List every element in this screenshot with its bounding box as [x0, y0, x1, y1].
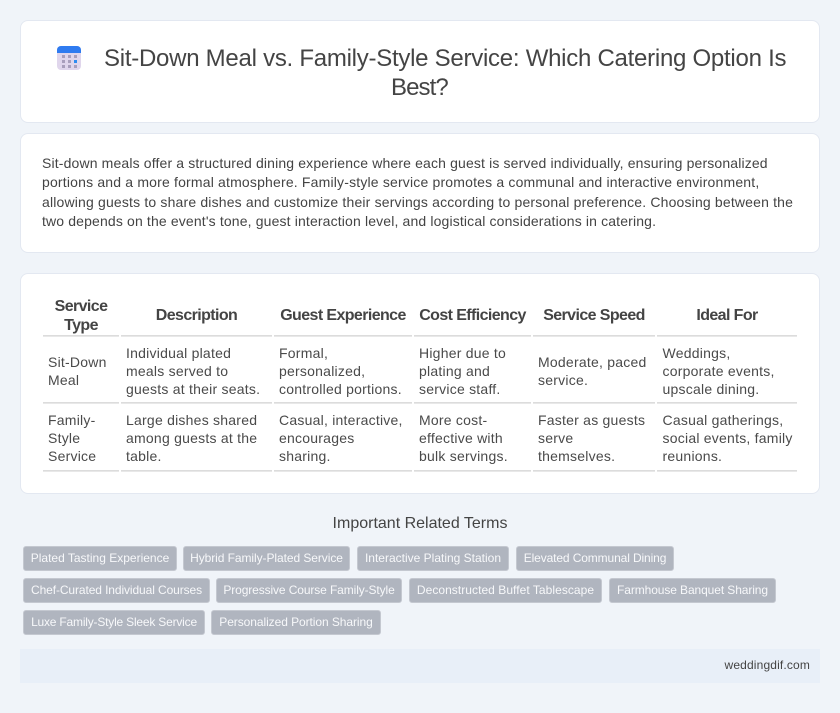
row: Family-Style Service: sharing.: [279, 448, 331, 464]
row: Family-Style Service: More cost-: [419, 412, 487, 428]
tag list: related terms: Progressive Course Family-Style: [223, 583, 395, 597]
panel: comparison table card: [20, 273, 820, 494]
column headers: Type: [64, 317, 98, 334]
text block: intro paragraph: Sit-down meals offer a structured dining experience where each guest is served individually, ensuring personalized: [42, 155, 768, 171]
row: Sit-Down Meal: Moderate, paced: [538, 354, 647, 370]
row: Family-Style Service: Large dishes shared: [126, 412, 257, 428]
column headers: Cost Efficiency: [419, 307, 526, 324]
footer source text: weddingdif.com: [725, 658, 810, 672]
text block: intro paragraph: [42, 155, 793, 229]
row: Family-Style Service: encourages: [279, 430, 354, 446]
row: Sit-Down Meal: upscale dining.: [662, 381, 759, 397]
row: Sit-Down Meal: personalized,: [279, 363, 365, 379]
tag list: related terms: Hybrid Family-Plated Service: [190, 551, 343, 565]
row: Sit-Down Meal: Weddings,: [662, 345, 730, 361]
row: Sit-Down Meal: Sit-Down: [48, 354, 107, 370]
tag list: related terms: Luxe Family-Style Sleek Service: [31, 615, 197, 629]
row: Sit-Down Meal: service.: [538, 372, 588, 388]
row: Sit-Down Meal: service staff.: [419, 381, 501, 397]
title: [104, 45, 786, 101]
footer bar: [20, 649, 820, 683]
column headers: Service: [55, 298, 107, 315]
panel: title card: [20, 20, 820, 123]
title: Best?: [391, 74, 448, 101]
row: Sit-Down Meal: guests at their seats.: [126, 381, 260, 397]
row: Sit-Down Meal: corporate events,: [662, 363, 775, 379]
tag list: related terms: Interactive Plating Station: [365, 551, 501, 565]
row: Sit-Down Meal: plating and: [419, 363, 490, 379]
row: Family-Style Service: effective with: [419, 430, 503, 446]
column headers: Ideal For: [696, 307, 758, 324]
column headers: Guest Experience: [280, 307, 406, 324]
row: Family-Style Service: reunions.: [662, 448, 722, 464]
column headers: [55, 298, 758, 334]
row: Sit-Down Meal: Higher due to: [419, 345, 506, 361]
row: Sit-Down Meal: controlled portions.: [279, 381, 402, 397]
title: Sit-Down Meal vs. Family-Style Service: Which Catering Option Is: [104, 45, 786, 72]
row: Family-Style Service: Service: [48, 448, 96, 464]
text block: intro paragraph: allowing guests to share dishes and customize their servings according to personal preference. Choosing between the: [42, 194, 793, 210]
row: Sit-Down Meal: Formal,: [279, 345, 328, 361]
table: comparison of service types: [43, 298, 797, 472]
heading: important related terms: Important Related Terms: [333, 515, 507, 532]
tag list: related terms: Farmhouse Banquet Sharing: [617, 583, 768, 597]
row: Family-Style Service: Casual gatherings,: [662, 412, 783, 428]
tag list: related terms: Elevated Communal Dining: [524, 551, 666, 565]
row: Family-Style Service: serve: [538, 430, 573, 446]
row: Family-Style Service: among guests at the: [126, 430, 257, 446]
text block: intro paragraph: portions and a more formal atmosphere. Family-style service promotes a communal and interactive environment,: [42, 174, 759, 190]
row: Family-Style Service: bulk servings.: [419, 448, 508, 464]
row: Family-Style Service: social events, family: [662, 430, 793, 446]
tag list: related terms: [23, 546, 776, 635]
column headers: Service Speed: [543, 307, 645, 324]
tag list: related terms: Chef-Curated Individual Courses: [31, 583, 202, 597]
row: Sit-Down Meal: [48, 345, 775, 397]
row: Sit-Down Meal: Individual plated: [126, 345, 231, 361]
icon: calendar: [57, 46, 81, 70]
row: Family-Style Service: Casual, interactive,: [279, 412, 403, 428]
row: Family-Style Service: Style: [48, 430, 80, 446]
row: Family-Style Service: themselves.: [538, 448, 615, 464]
column headers: Description: [156, 307, 237, 324]
row: Family-Style Service: Faster as guests: [538, 412, 645, 428]
row: Sit-Down Meal: meals served to: [126, 363, 228, 379]
text block: intro paragraph: two depends on the event's tone, guest interaction level, and logistical considerations in catering.: [42, 213, 656, 229]
tag list: related terms: Plated Tasting Experience: [31, 551, 169, 565]
row: Sit-Down Meal: Meal: [48, 372, 79, 388]
tag list: related terms: Deconstructed Buffet Tablescape: [417, 583, 594, 597]
row: Family-Style Service: [48, 412, 793, 464]
panel: intro paragraph card: [20, 133, 820, 253]
tag list: related terms: Personalized Portion Sharing: [219, 615, 373, 629]
row: Family-Style Service: Family-: [48, 412, 96, 428]
row: Family-Style Service: table.: [126, 448, 162, 464]
